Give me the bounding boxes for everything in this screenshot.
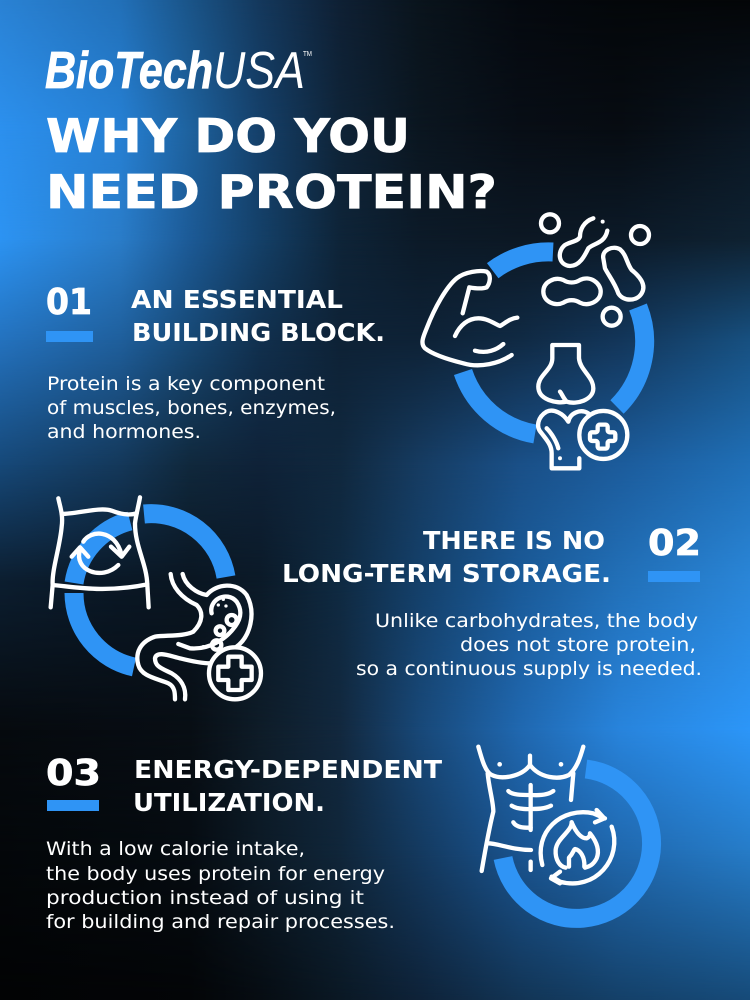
logo: USA <box>213 42 305 100</box>
text 02 <box>356 610 702 680</box>
heading 02: THERE IS NO <box>423 526 605 555</box>
number 03 <box>46 753 101 811</box>
icon: muscle, molecules and bone <box>422 214 649 468</box>
text 03: With a low calorie intake, <box>46 838 305 860</box>
icon: abdomen with flame <box>478 747 652 918</box>
title: WHY DO YOU <box>46 109 410 163</box>
heading 01: AN ESSENTIAL <box>131 285 343 314</box>
text 03: the body uses protein for energy <box>46 863 385 885</box>
number 03: 03 <box>46 753 101 794</box>
text 01: of muscles, bones, enzymes, <box>47 397 336 419</box>
icon: waist and stomach <box>51 497 261 699</box>
number 01 <box>46 282 93 342</box>
text 03: for building and repair processes. <box>46 911 395 933</box>
heading 01 <box>131 285 385 347</box>
text 02: does not store protein, <box>460 634 696 656</box>
logo: TM <box>303 51 312 58</box>
text 03 <box>46 838 395 933</box>
heading 03: UTILIZATION. <box>133 788 325 817</box>
logo: BioTech <box>45 42 213 100</box>
text 01: and hormones. <box>47 421 201 443</box>
number 01: 01 <box>46 282 92 323</box>
heading 02 <box>282 526 611 588</box>
title <box>46 109 497 219</box>
heading 02: LONG-TERM STORAGE. <box>282 559 611 588</box>
text 02: Unlike carbohydrates, the body <box>375 610 698 632</box>
title: NEED PROTEIN? <box>46 165 497 219</box>
heading 03 <box>133 755 442 817</box>
text 01 <box>47 373 336 443</box>
panel: section 02 <box>51 497 702 699</box>
text 03: production instead of using it <box>46 887 364 909</box>
text 02: so a continuous supply is needed. <box>356 658 702 680</box>
panel: section 01 <box>46 214 649 468</box>
panel: section 03 <box>46 747 652 933</box>
heading 01: BUILDING BLOCK. <box>132 318 385 347</box>
text 01: Protein is a key component <box>47 373 325 395</box>
heading 03: ENERGY-DEPENDENT <box>134 755 442 784</box>
number 02 <box>648 523 701 582</box>
number 02: 02 <box>648 523 701 564</box>
